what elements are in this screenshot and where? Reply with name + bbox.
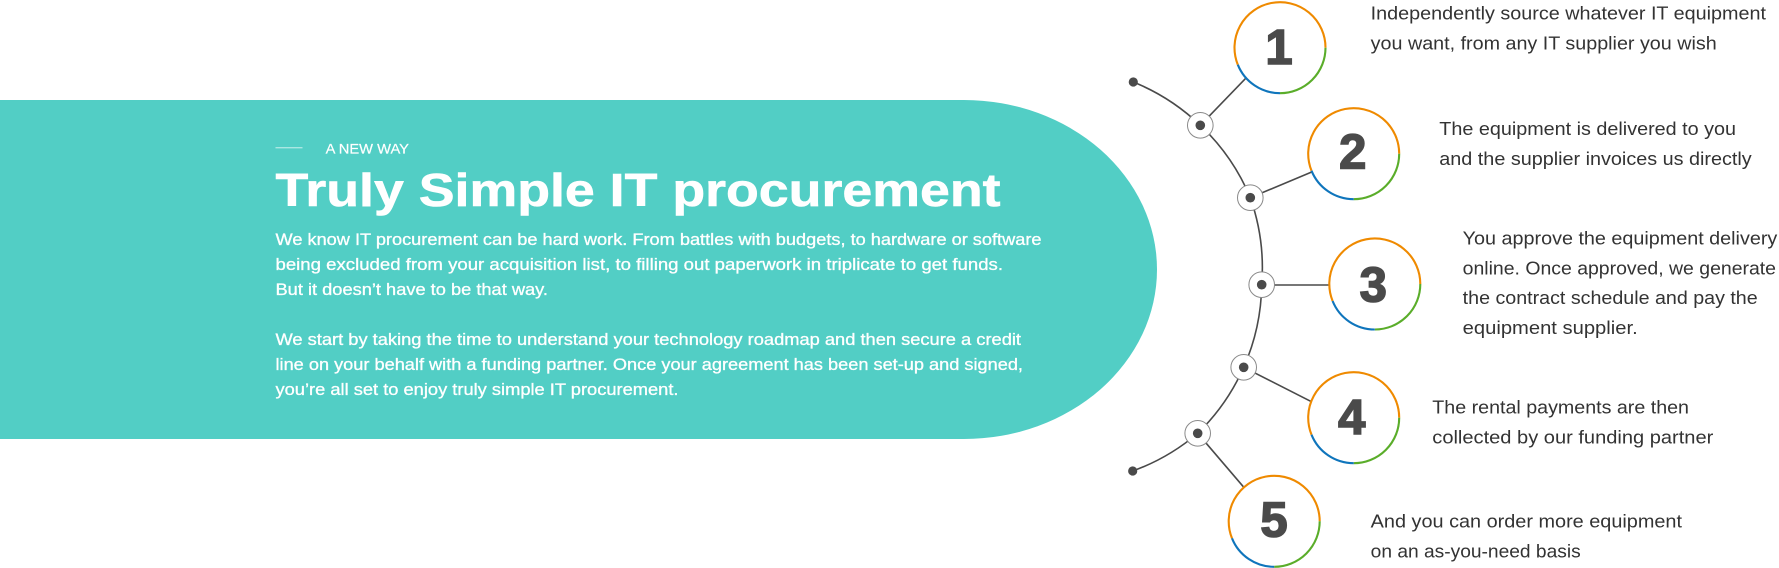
step 5 badge: 5: [1260, 493, 1288, 547]
step 5 text: on an as-you-need basis: [1371, 540, 1581, 561]
step 5 text: And you can order more equipment: [1371, 510, 1682, 531]
node 5: [1185, 420, 1210, 446]
heading: Truly Simple IT procurement: [276, 164, 1001, 216]
step 5 badge: [1229, 476, 1320, 567]
text block: introduction paragraph: But it doesn’t have to be that way.: [276, 281, 548, 299]
text block: introduction paragraph: being excluded from your acquisition list, to filling out paperwork in triplicate to get funds.: [276, 256, 1003, 274]
step 3 badge: [1329, 238, 1420, 330]
node 1: [1188, 112, 1213, 138]
step 1 text: Independently source whatever IT equipment: [1371, 2, 1766, 23]
step 3 text: You approve the equipment delivery: [1463, 227, 1778, 248]
step 4 text: collected by our funding partner: [1432, 426, 1713, 447]
chart: curved step connector: [1128, 77, 1329, 487]
step 4 badge: [1308, 372, 1399, 463]
step 2 badge: 2: [1339, 125, 1366, 179]
text block: approach paragraph: [276, 331, 1023, 399]
step 5 text: [1371, 510, 1682, 561]
step 3 text: [1463, 227, 1778, 338]
text block: introduction paragraph: [276, 231, 1042, 299]
step 2 text: and the supplier invoices us directly: [1439, 148, 1753, 169]
text block: approach paragraph: line on your behalf with a funding partner. Once your agreement has been set-up and signed,: [276, 356, 1023, 374]
node 4: [1231, 354, 1256, 380]
step 1 badge: [1234, 2, 1326, 93]
eyebrow: a new way: A NEW WAY: [326, 140, 410, 156]
step 4 text: [1432, 396, 1713, 447]
text block: introduction paragraph: We know IT procurement can be hard work. From battles with budgets, to hardware or software: [276, 231, 1042, 249]
curve end dots: [1128, 77, 1138, 476]
step 3 text: online. Once approved, we generate: [1463, 257, 1776, 278]
text block: approach paragraph: We start by taking the time to understand your technology roadmap and then secure a credit: [276, 331, 1022, 349]
eyebrow: a new way: [276, 140, 410, 156]
node 3: [1249, 272, 1274, 298]
step 4 text: The rental payments are then: [1432, 396, 1689, 417]
step 1 badge: 1: [1265, 21, 1293, 75]
step 2 text: The equipment is delivered to you: [1439, 118, 1736, 139]
main curve: [1133, 82, 1262, 471]
node 2: [1238, 185, 1263, 210]
step 3 text: equipment supplier.: [1463, 317, 1638, 338]
step 3 text: the contract schedule and pay the: [1463, 287, 1758, 308]
branch lines: [1198, 78, 1329, 487]
text block: approach paragraph: you’re all set to enjoy truly simple IT procurement.: [276, 381, 678, 399]
step 4 badge: 4: [1338, 391, 1365, 445]
step 1 text: [1371, 2, 1766, 53]
step 2 badge: [1308, 108, 1399, 199]
step 1 text: you want, from any IT supplier you wish: [1371, 32, 1717, 53]
step 2 text: [1439, 118, 1753, 169]
step 3 badge: 3: [1360, 258, 1387, 312]
teal rounded banner: [0, 100, 1157, 439]
panel: intro: [0, 100, 1157, 439]
